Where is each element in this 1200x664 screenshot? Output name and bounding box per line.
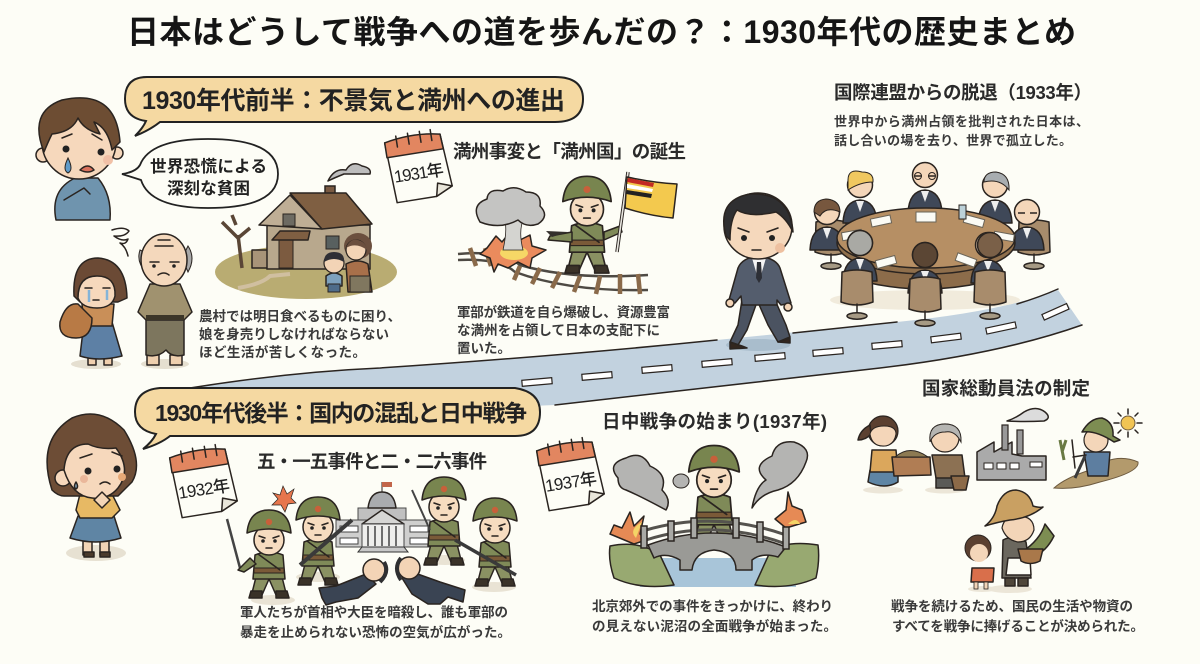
text: mobilization law: すべてを戦争に捧げることが決められた。: [892, 618, 1144, 634]
text: Manchurian Incident: 軍部が鉄道を自ら爆破し、資源豊富: [457, 304, 670, 320]
text: mobilization law: 戦争を続けるため、国民の生活や物資の: [891, 598, 1133, 614]
banner: late 1930s: [135, 388, 540, 449]
heading: National Mobilization Law: 国家総動員法の制定: [922, 378, 1090, 399]
figure: elderly man with basket: [925, 424, 969, 494]
heading: May 15 and Feb 26 incidents: 五・一五事件と二・二六事件: [257, 451, 487, 472]
illustration: railway explosion and soldier with flag: [458, 172, 677, 294]
text: Manchurian Incident: [457, 304, 670, 356]
icon: chimney smoke: [328, 164, 370, 181]
panel: late 1930s: [47, 378, 1144, 640]
text: start of war: の見えない泥沼の全面戦争が始まった。: [592, 618, 837, 634]
banner: late 1930s: 1930年代後半：国内の混乱と日中戦争: [155, 400, 527, 426]
text: assassinations: [240, 604, 511, 640]
heading: Sino-Japanese War: 日中戦争の始まり(1937年): [602, 411, 827, 432]
illustration: civilians and factory: [858, 408, 1142, 593]
text: Manchurian Incident: 置いた。: [457, 341, 511, 356]
text: Manchurian Incident: な満州を占領して日本の支配下に: [457, 322, 660, 338]
road timeline: [190, 289, 1082, 420]
text: League of Nations withdrawal: 世界中から満州占領を批判された日本は、: [834, 114, 1089, 129]
heading: Manchurian Incident: 満州事変と「満州国」の誕生: [453, 141, 686, 162]
speech bubble: poverty: 世界恐慌による: [150, 157, 267, 176]
text: rural hardship: ほど生活が苦しくなった。: [199, 344, 366, 360]
text: rural hardship: [199, 308, 401, 360]
text: start of war: [592, 598, 837, 634]
banner: early 1930s: [125, 77, 583, 136]
figure: farmer: [1054, 418, 1138, 488]
character: crying girl with bundle: [60, 258, 127, 369]
title: 日本はどうして戦争への道を歩んだの？：1930年代の歴史まとめ: [127, 14, 1076, 50]
text: rural hardship: 娘を身売りしなければならない: [199, 326, 389, 342]
calendar: 1932: [169, 443, 238, 518]
banner: early 1930s: 1930年代前半：不景気と満州への進出: [142, 87, 565, 115]
character: crying boy: [36, 98, 123, 220]
heading: League of Nations withdrawal: 国際連盟からの脱退（1933年）: [834, 82, 1092, 103]
text: League of Nations withdrawal: [834, 114, 1089, 148]
text: mobilization law: [891, 598, 1144, 634]
calendar: 1937: 1937年: [544, 469, 598, 496]
text: assassinations: 暴走を止められない恐怖の空気が広がった。: [240, 624, 511, 640]
figures: fallen officials: [319, 557, 465, 605]
text: rural hardship: 農村では明日食べるものに困り、: [199, 308, 401, 324]
character: worried woman: [47, 414, 137, 561]
speech bubble: poverty: 深刻な貧困: [167, 179, 250, 198]
figure: woman carrying crate: [858, 416, 931, 494]
text: start of war: 北京郊外での事件をきっかけに、終わり: [592, 598, 833, 614]
calendar: 1931: 1931年: [393, 160, 445, 187]
figure: woman with straw hat and child: [965, 490, 1054, 593]
calendar: 1931: [384, 128, 453, 203]
icon: explosion spark: [272, 486, 296, 512]
illustration: soldier on bridge: [610, 442, 819, 587]
character: politician walking along road: [724, 193, 793, 351]
calendar: 1937: [536, 436, 605, 511]
icon: factory: [977, 408, 1048, 480]
illustration: round-table conference: [810, 162, 1050, 326]
panel: early 1930s: [36, 77, 1092, 369]
character: elderly man: [138, 234, 192, 369]
speech bubble: poverty: [122, 139, 278, 208]
illustration: soldiers around parliament: [227, 477, 517, 605]
illustration: poor farmhouse and family: [215, 164, 397, 299]
calendar: 1932: 1932年: [177, 476, 231, 503]
text: assassinations: 軍人たちが首相や大臣を暗殺し、誰も軍部の: [240, 604, 508, 620]
icon: sun: [1114, 409, 1142, 437]
icon: worry squiggle: [112, 228, 129, 256]
text: League of Nations withdrawal: 話し合いの場を去り、世界で孤立した。: [834, 133, 1072, 148]
